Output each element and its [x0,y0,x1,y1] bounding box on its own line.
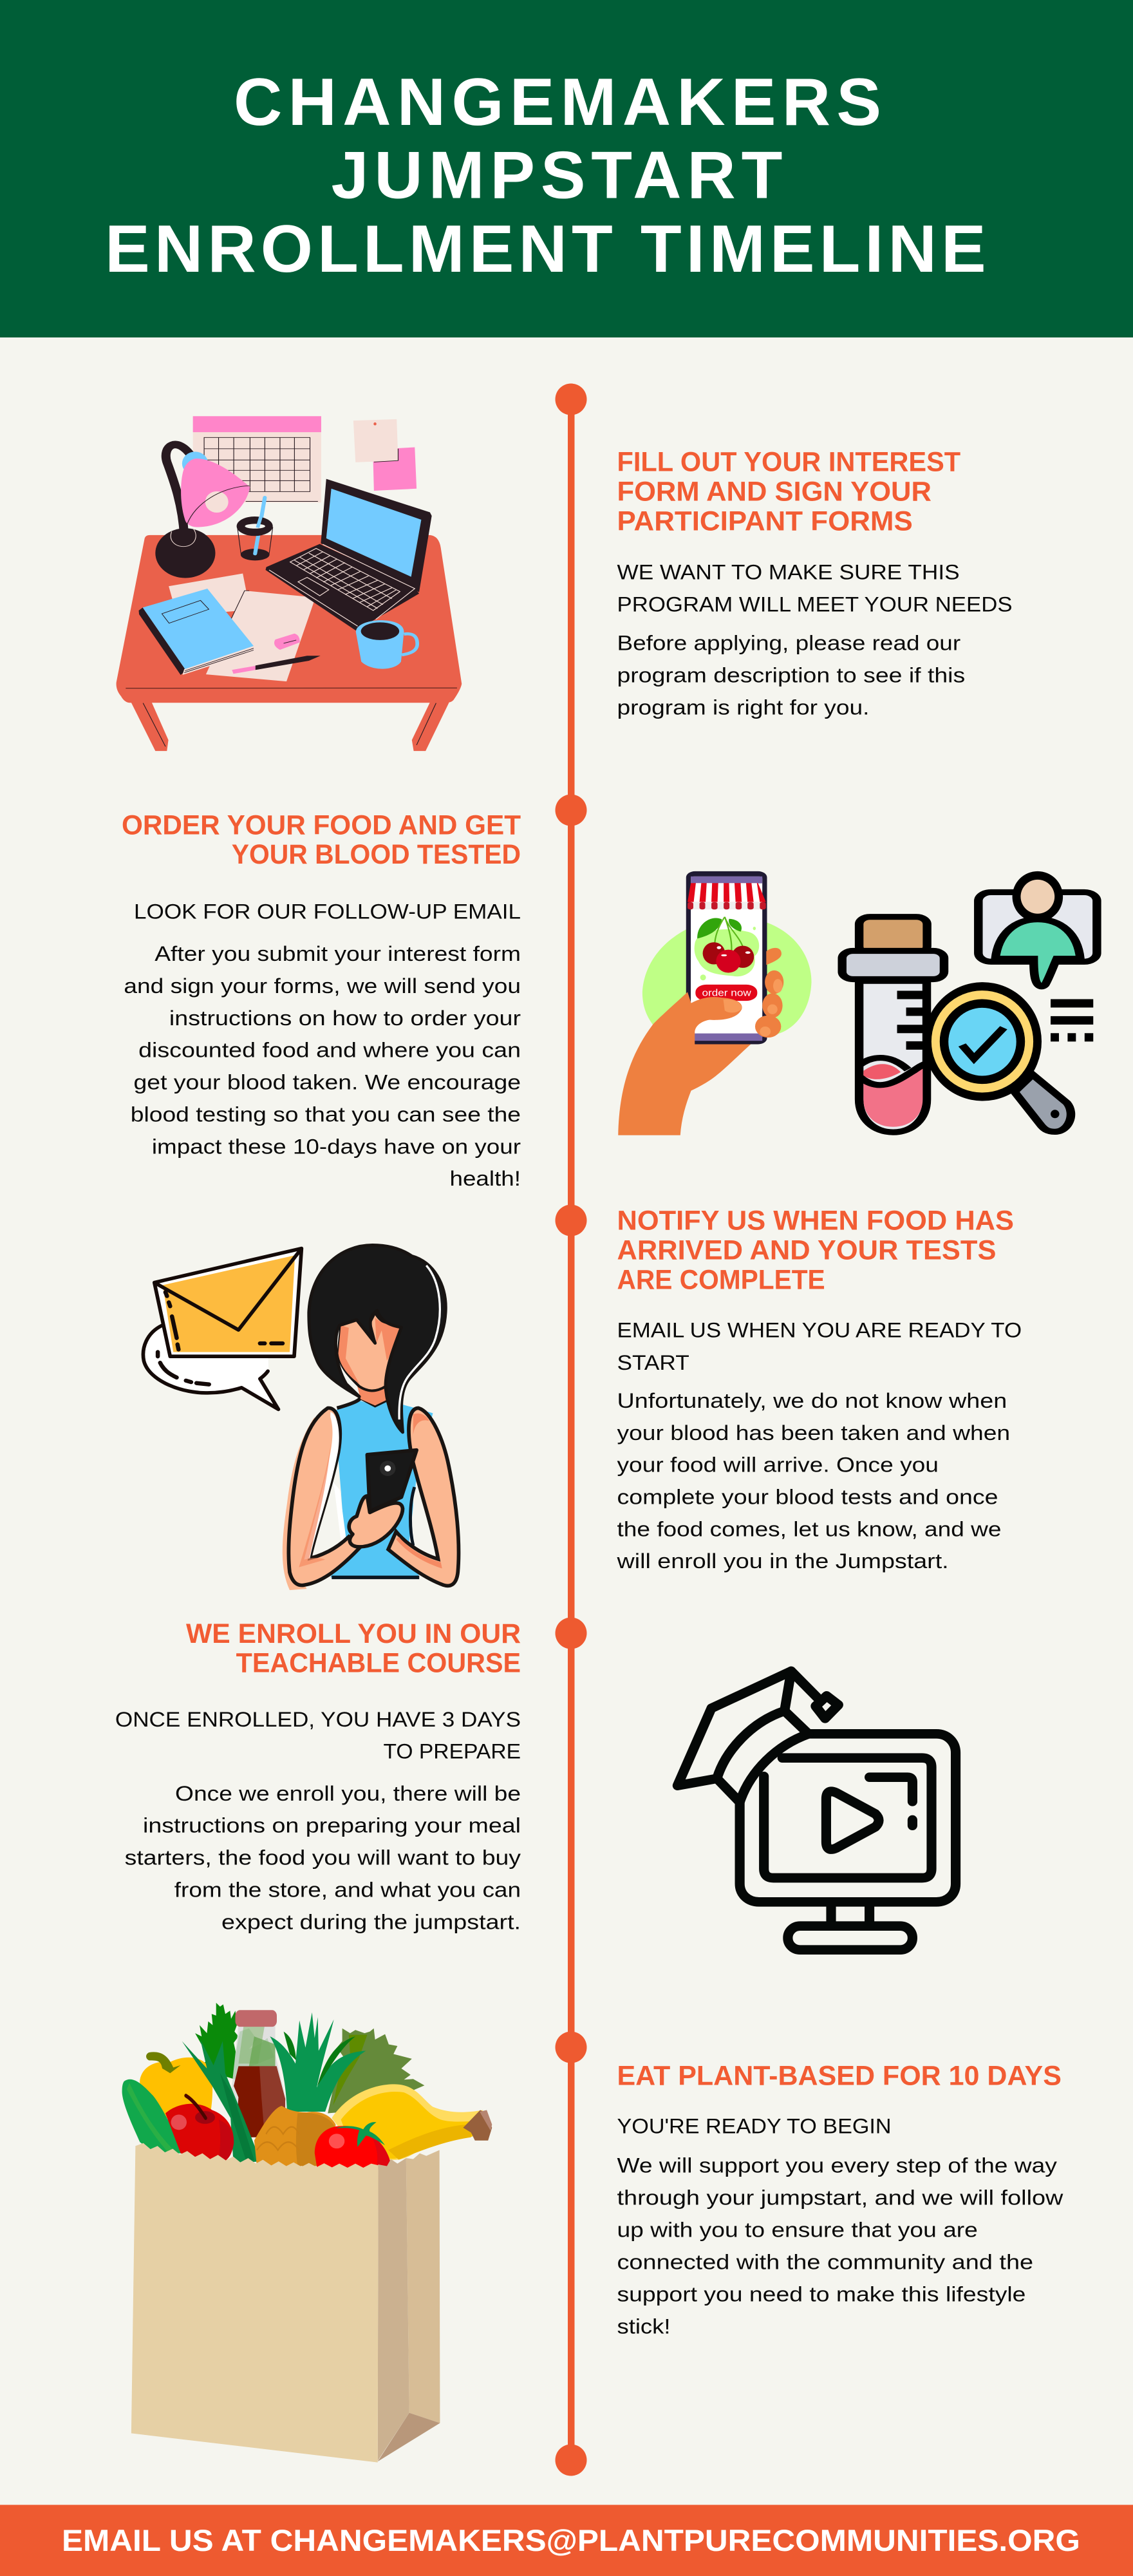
cucumber [122,2079,185,2154]
step 5 body: support you need to make this lifestyle [617,2282,1025,2306]
step 1 heading: FORM AND SIGN YOUR [617,477,932,507]
footer email text: EMAIL US AT CHANGEMAKERS@PLANTPURECOMMUNITIES.ORG [62,2523,1080,2557]
coffee mug [356,620,417,669]
step 3 subheading: EMAIL US WHEN YOU ARE READY TO [617,1319,1022,1342]
step 3 heading: NOTIFY US WHEN FOOD HAS [617,1205,1014,1236]
pineapple [254,2106,335,2166]
step 2 body: health! [449,1167,521,1190]
leek [182,2040,261,2163]
graduation cap [677,1671,838,1802]
step 2 body: and sign your forms, we will send you [124,974,521,998]
illustration: desk with laptop and lamp [117,416,462,751]
calendar [193,416,321,502]
pen [232,656,321,674]
panel: step 3 text [616,1205,1022,1573]
kale [328,2029,424,2113]
desk lamp [155,444,250,578]
step 5 body: We will support you every step of the way [617,2154,1057,2177]
bottle [230,2010,286,2137]
yellow pepper [140,2052,212,2118]
step 3 subheading [617,1319,1022,1374]
step 1 body: Before applying, please read our [617,631,961,654]
step 4 heading [186,1618,521,1679]
step 2 body: get your blood taken. We encourage [134,1071,521,1094]
speech bubble [143,1325,278,1409]
step 3 body: will enroll you in the Jumpstart. [616,1549,949,1573]
step 4 subheading: ONCE ENROLLED, YOU HAVE 3 DAYS [115,1708,521,1731]
woman [283,1245,458,1590]
step 1 heading [617,447,960,537]
magnifier with check mark [924,982,1071,1132]
person card [979,871,1097,987]
step 2 body: impact these 10-days have on your [152,1135,521,1159]
step 2 body: After you submit your interest form [154,942,521,965]
step 5 body: connected with the community and the [617,2250,1033,2273]
panel: step 1 text [617,447,1013,719]
step 1 heading: FILL OUT YOUR INTEREST [617,447,960,478]
step 2 heading: YOUR BLOOD TESTED [232,839,521,870]
step 5 body: stick! [617,2315,671,2338]
step 4 heading: WE ENROLL YOU IN OUR [186,1618,521,1649]
cherries [695,917,759,980]
step 3 body: the food comes, let us know, and we [617,1517,1001,1540]
title: CHANGEMAKERS [234,65,881,140]
step 2 heading [122,810,521,870]
hand [618,948,783,1135]
envelope [154,1249,301,1356]
step 3 heading: ARE COMPLETE [617,1264,825,1295]
step 5 heading: EAT PLANT-BASED FOR 10 DAYS [617,2061,1062,2092]
step 2 body: instructions on how to order your [169,1007,521,1030]
panel: step 2 text [122,810,521,1190]
step 1 body [617,631,965,719]
panel: step 4 text [115,1618,521,1933]
step 2 body: blood testing so that you can see the [131,1103,521,1126]
tomato [315,2122,390,2170]
step 4 body: from the store, and what you can [174,1879,521,1902]
step 1 subheading: PROGRAM WILL MEET YOUR NEEDS [617,592,1013,616]
step 3 heading: ARRIVED AND YOUR TESTS [617,1235,996,1266]
laptop [265,479,432,630]
step 1 subheading [617,560,1013,616]
step 4 body: starters, the food you will want to buy [125,1846,521,1870]
phone [686,871,767,1045]
papers [169,574,315,681]
illustration: phone in hand with cherries [618,871,1097,1135]
step 4 heading: TEACHABLE COURSE [236,1648,521,1679]
banana [332,2084,492,2160]
step 2 subheading: LOOK FOR OUR FOLLOW-UP EMAIL [134,900,521,923]
step 3 body: your blood has been taken and when [617,1421,1010,1444]
illustration: online course monitor with graduation cap [677,1671,956,1950]
title: ENROLLMENT TIMELINE [105,212,986,287]
pineapple leaves [270,2012,366,2112]
order now button: order now [702,987,752,998]
pencil cup [237,498,273,560]
step 1 subheading: WE WANT TO MAKE SURE THIS [617,560,960,583]
monitor [740,1734,956,1950]
order now button [695,985,757,1001]
footer banner [0,2505,1133,2576]
step 1 heading: PARTICIPANT FORMS [617,506,913,537]
illustration: paper grocery bag [122,2003,492,2463]
step 3 body: complete your blood tests and once [617,1486,998,1509]
step 1 body: program is right for you. [617,696,869,719]
header banner [0,0,1133,337]
step 5 body: through your jumpstart, and we will follow [617,2186,1063,2209]
step 3 subheading: START [617,1351,689,1374]
title [105,65,986,287]
step 4 subheading: TO PREPARE [383,1739,521,1763]
step 3 heading [617,1205,1014,1295]
step 5 subheading: YOU'RE READY TO BEGIN [617,2115,892,2138]
step 2 heading: ORDER YOUR FOOD AND GET [122,810,521,840]
timeline [555,384,587,2476]
step 1 body: program description to see if this [617,663,965,687]
step 3 body [616,1389,1010,1573]
step 3 body: your food will arrive. Once you [617,1454,939,1477]
apple [165,2096,234,2163]
step 4 body [125,1782,521,1933]
title: JUMPSTART [332,138,782,213]
text lines [1051,999,1093,1041]
arm shadows [283,1417,315,1590]
test tube [842,917,944,1132]
notebook [139,589,254,675]
play button [826,1792,879,1850]
step 2 body [124,942,521,1190]
panel: step 5 text [617,2061,1063,2338]
step 5 body [617,2154,1063,2338]
step 4 body: expect during the jumpstart. [221,1911,521,1933]
step 4 subheading [115,1708,521,1763]
sticky notes [353,419,417,491]
step 4 body: instructions on preparing your meal [143,1814,521,1837]
step 2 body: discounted food and where you can [138,1039,521,1062]
paper bag [131,2143,440,2463]
step 4 body: Once we enroll you, there will be [175,1782,521,1805]
parsley [195,2003,274,2079]
illustration: woman with phone and email bubble [143,1245,458,1590]
step 3 body: Unfortunately, we do not know when [617,1389,1007,1412]
step 5 body: up with you to ensure that you are [617,2218,978,2241]
